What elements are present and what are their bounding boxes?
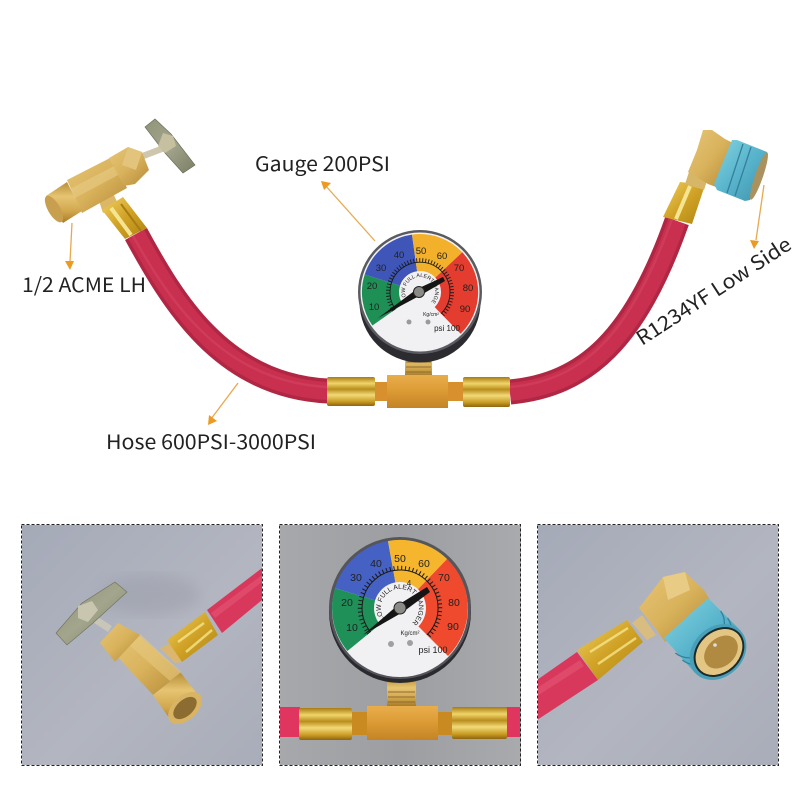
gauge zones: [332, 540, 468, 656]
numerals: 40: [370, 558, 382, 570]
gauge: main: LOW FULL ALERT DANGER: [401, 273, 439, 304]
gauge numerals: Kg/cm²: [423, 312, 439, 318]
panel: coupler close-up: [537, 524, 778, 766]
gauge numerals: 50: [416, 246, 426, 257]
numerals: Kg/cm²: [400, 631, 420, 637]
numerals: 50: [394, 553, 406, 565]
needle: [363, 587, 430, 635]
numerals: [341, 553, 460, 655]
numerals: psi 100: [418, 645, 448, 655]
numerals: 30: [350, 572, 362, 584]
gauge numerals: 20: [367, 281, 377, 292]
label: acme: 1/2 ACME LH: [22, 269, 146, 298]
numerals: 60: [418, 558, 430, 570]
hose: left section: [133, 234, 328, 391]
gauge numerals: psi 100: [434, 324, 460, 333]
gauge numerals: 10: [369, 302, 379, 313]
panel: valve close-up: [22, 524, 262, 766]
numerals: 20: [341, 597, 353, 609]
numerals: 90: [447, 621, 459, 633]
arrow: gauge: [321, 181, 375, 241]
label: gauge: Gauge 200PSI: [255, 148, 390, 177]
gauge colour zones: [362, 234, 478, 334]
numerals: 80: [448, 597, 460, 609]
numerals: 70: [438, 572, 450, 584]
arrow: hose: [208, 383, 238, 425]
numerals: 4: [407, 579, 412, 588]
left valve fitting: [41, 119, 195, 239]
icon: T-handle: [143, 119, 195, 173]
arrow: acme: [65, 223, 74, 270]
right coupler fitting: [663, 130, 771, 224]
panel: gauge close-up: LOW FULL ALERT DANGER: [376, 584, 424, 626]
gauge numerals: 40: [394, 250, 404, 261]
tee fitting with collars: [327, 350, 510, 408]
numerals: 10: [346, 622, 358, 634]
label: hose: Hose 600PSI-3000PSI: [106, 426, 316, 455]
gauge numerals: 90: [460, 304, 470, 315]
icon: blue coupler: [714, 140, 771, 201]
hose: right section: [510, 219, 677, 392]
panel: gauge close-up: [279, 524, 521, 766]
gauge numerals: 30: [376, 263, 386, 274]
arrow: r1234yf: [750, 185, 764, 249]
gauge numerals: 80: [463, 283, 473, 294]
needle: [378, 277, 445, 318]
label: r1234yf: R1234YF Low Side: [629, 229, 796, 351]
gauge numerals: 70: [454, 263, 464, 274]
gauge numerals: [367, 246, 473, 333]
gauge: main: [358, 230, 482, 362]
gauge numerals: 60: [437, 251, 447, 262]
